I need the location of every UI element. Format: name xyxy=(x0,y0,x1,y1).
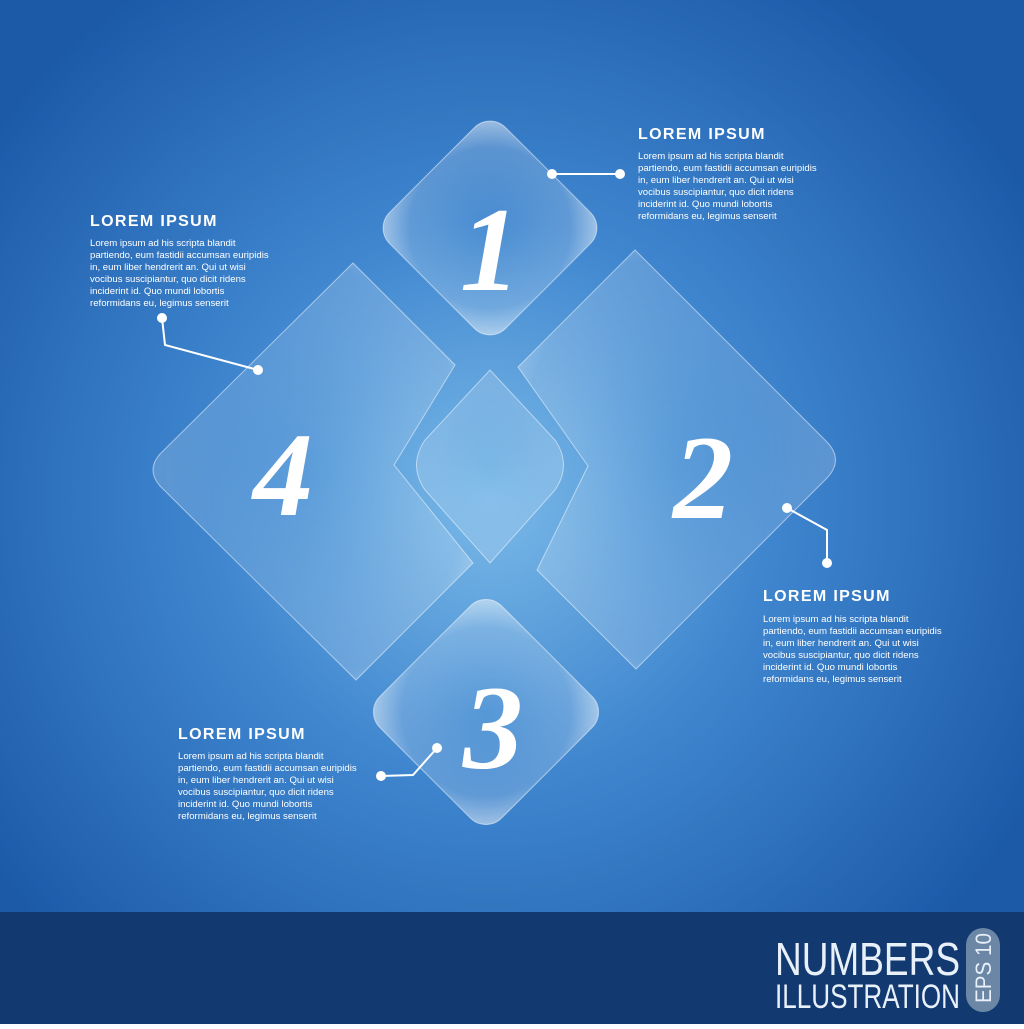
text block 2: inciderint id. Quo mundi lobortis xyxy=(763,662,898,673)
text block 3: vocibus suscipiantur, quo dicit ridens xyxy=(178,787,334,798)
text block 3: inciderint id. Quo mundi lobortis xyxy=(178,799,313,810)
text block 3: reformidans eu, legimus senserit xyxy=(178,811,317,822)
text block 2: vocibus suscipiantur, quo dicit ridens xyxy=(763,650,919,661)
text block 1: reformidans eu, legimus senserit xyxy=(638,211,777,222)
diamond center xyxy=(416,370,564,563)
connector 3 xyxy=(377,744,441,780)
diamond 4: 4 xyxy=(251,408,313,541)
diamond 3 xyxy=(364,590,608,834)
text block 3: in, eum liber hendrerit an. Qui ut wisi xyxy=(178,775,334,786)
connector 1 xyxy=(548,170,624,178)
text block 1: vocibus suscipiantur, quo dicit ridens xyxy=(638,187,794,198)
text block 2: partiendo, eum fastidii accumsan euripidis xyxy=(763,626,942,637)
diamond 1: 1 xyxy=(460,183,520,316)
text block 4: vocibus suscipiantur, quo dicit ridens xyxy=(90,274,246,285)
text block 1: LOREM IPSUM xyxy=(638,126,766,143)
text block 1: Lorem ipsum ad his scripta blandit xyxy=(638,151,784,162)
text block 3: LOREM IPSUM xyxy=(178,726,306,743)
text block 2: reformidans eu, legimus senserit xyxy=(763,674,902,685)
text block 2: in, eum liber hendrerit an. Qui ut wisi xyxy=(763,638,919,649)
text block 2: LOREM IPSUM xyxy=(763,588,891,605)
footer title: NUMBERS xyxy=(775,933,960,985)
text block 1: inciderint id. Quo mundi lobortis xyxy=(638,199,773,210)
footer title: ILLUSTRATION xyxy=(775,978,960,1016)
text block 4: partiendo, eum fastidii accumsan euripidis xyxy=(90,250,269,261)
text block 4: inciderint id. Quo mundi lobortis xyxy=(90,286,225,297)
EPS badge: EPS 10 xyxy=(971,933,996,1003)
connector 4 xyxy=(158,314,262,374)
text block 4: reformidans eu, legimus senserit xyxy=(90,298,229,309)
diamond 1 xyxy=(374,112,606,344)
diamond 2 xyxy=(518,250,836,669)
text block 2 xyxy=(763,588,942,685)
diamond 4 xyxy=(153,263,473,680)
text block 3: partiendo, eum fastidii accumsan euripidis xyxy=(178,763,357,774)
text block 4: LOREM IPSUM xyxy=(90,213,218,230)
text block 3 xyxy=(178,726,357,822)
text block 1: in, eum liber hendrerit an. Qui ut wisi xyxy=(638,175,794,186)
footer title xyxy=(775,933,960,1016)
connector 2 xyxy=(783,504,831,567)
diamond 3: 3 xyxy=(462,661,523,794)
EPS badge xyxy=(966,928,1000,1012)
text block 2: Lorem ipsum ad his scripta blandit xyxy=(763,614,909,625)
diamond 2: 2 xyxy=(671,411,733,544)
text block 1 xyxy=(638,126,817,222)
bottom band xyxy=(0,912,1024,1024)
text block 3: Lorem ipsum ad his scripta blandit xyxy=(178,751,324,762)
text block 4: in, eum liber hendrerit an. Qui ut wisi xyxy=(90,262,246,273)
text block 4 xyxy=(90,213,269,309)
text block 4: Lorem ipsum ad his scripta blandit xyxy=(90,238,236,249)
text block 1: partiendo, eum fastidii accumsan euripidis xyxy=(638,163,817,174)
